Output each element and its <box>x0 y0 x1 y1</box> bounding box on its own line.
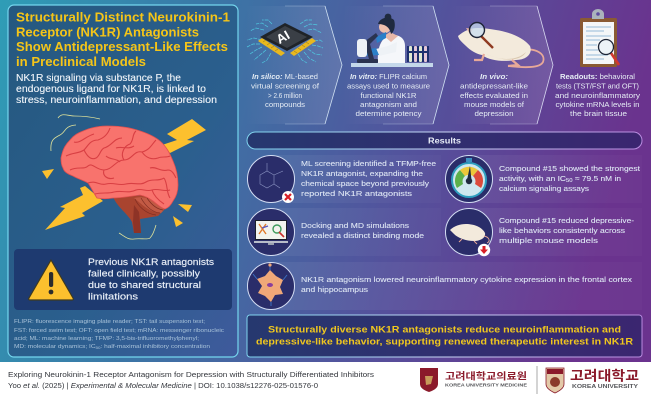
abbreviations: 50 <box>96 345 101 350</box>
title: Show Antidepressant-Like Effects <box>16 39 228 54</box>
icon: gauge <box>446 156 492 202</box>
text: readouts <box>555 72 640 118</box>
text: Compound #15 showed the strongest <box>499 164 641 173</box>
text: readouts: and neuroinflammatory <box>555 91 640 100</box>
conclusion: Structurally diverse NK1R antagonists reduce neuroinflammation and <box>268 324 621 336</box>
text: NK1R antagonism lowered neuroinflammatory cytokine expression in the frontal cortex <box>301 275 632 284</box>
abbreviations: FST: forced swim test; OFT: open field test; mRNA: messenger ribonucleic <box>14 328 224 334</box>
text: chemical space beyond previously <box>301 179 429 188</box>
conclusion: depressive-like behavior, supporting renewed therapeutic interest in NK1R <box>256 336 633 348</box>
icon: monitor <box>248 208 294 256</box>
abbreviations: MD: molecular dynamics; IC <box>14 344 86 350</box>
callout text: due to shared structural <box>88 280 201 291</box>
callout: previous failures <box>14 249 232 310</box>
callout text: limitations <box>88 292 138 302</box>
divider <box>536 366 538 394</box>
result: docking <box>248 208 441 256</box>
text: in vivo <box>460 72 528 118</box>
text: 50 <box>566 178 573 184</box>
text: in vitro: assays used to measure <box>347 82 430 90</box>
heading: results: Results <box>428 136 461 146</box>
text: calcium signaling assays <box>499 184 589 193</box>
text: in vitro: functional NK1R <box>360 91 416 100</box>
icon: AI chip: AI <box>274 27 292 47</box>
panel: in vivo step <box>449 6 553 124</box>
text: readouts: tests (TST/FST and OFT) <box>556 82 639 90</box>
text: in vivo: In vivo: <box>480 72 509 81</box>
result: cytokines <box>248 262 642 310</box>
text: Docking and MD simulations <box>301 221 409 230</box>
citation: Exploring Neurokinin-1 Receptor Antagonism for Depression with Structurally Differentiated Inhibitors <box>8 370 374 379</box>
icon: warning triangle <box>29 260 73 300</box>
callout text <box>88 257 214 302</box>
logo: Korea University Medicine: 고려대학교의료원 <box>445 370 527 382</box>
icon: microglia cell <box>248 262 294 310</box>
text: NK1R antagonist, expanding the <box>301 169 423 178</box>
icon: mouse with down arrow <box>446 208 492 256</box>
text: in vivo: antidepressant-like <box>460 82 528 90</box>
text: readouts: cytokine mRNA levels in <box>556 100 640 109</box>
text: in vitro: antagonism and <box>360 100 417 109</box>
text: readouts: the brain tissue <box>570 109 627 118</box>
text: multiple mouse models <box>499 236 598 245</box>
intro text: NK1R signaling via substance P, the <box>16 73 182 84</box>
citation: Yoo et al. (2025) | Experimental & Molecular Medicine | DOI: 10.1038/s12276-025-01576-0 <box>8 381 318 390</box>
logo: Korea University Medicine <box>420 368 527 392</box>
heading: results <box>247 132 642 149</box>
abbreviations: FLIPR: fluorescence imaging plate reader; TST: tail suspension test; <box>14 319 205 325</box>
conclusion <box>247 315 642 357</box>
text <box>301 275 632 294</box>
text: in vivo: depression <box>474 109 514 118</box>
text: in silico: virtual screening of <box>251 82 320 90</box>
title: in Preclinical Models <box>16 54 146 69</box>
abbreviations: acid; ML: machine learning; TFMP: 3,5-bis-trifluoromethylphenyl; <box>14 336 199 342</box>
text: in silico <box>251 72 320 109</box>
text <box>301 159 436 198</box>
text: in vivo: mouse models of <box>464 100 525 109</box>
text <box>499 216 634 245</box>
panel: background and hypothesis <box>8 5 238 357</box>
intro text <box>16 73 217 106</box>
callout text: failed clinically, possibly <box>88 269 200 280</box>
logo: Korea University: 고려대학교 <box>570 368 639 384</box>
result: ML screening <box>248 155 441 203</box>
title <box>16 10 230 69</box>
text: ≈ 79.5 nM in <box>573 174 621 183</box>
logo: Korea University Medicine: KOREA UNIVERSITY MEDICINE <box>445 382 527 388</box>
result: behavior <box>446 208 642 256</box>
icon: mouse with magnifier <box>458 22 544 67</box>
result: compound potency <box>446 155 642 203</box>
text <box>499 164 641 193</box>
intro text: stress, neuroinflammation, and depression <box>16 95 217 106</box>
callout text: Previous NK1R antagonists <box>88 257 214 268</box>
abbreviations: : half-maximal inhibitory concentration <box>101 344 210 350</box>
icon: clipboard with magnifier <box>580 9 619 67</box>
text: in silico: > 2.6 million <box>268 91 302 100</box>
icon: brain with lightning bolt <box>42 115 206 239</box>
text: revealed a distinct binding mode <box>301 231 424 240</box>
text: in silico: compounds <box>265 100 305 109</box>
title: Receptor (NK1R) Antagonists <box>16 24 199 39</box>
text: reported NK1R antagonists <box>301 189 412 198</box>
icon: scientist with microscope <box>351 14 433 67</box>
intro text: endogenous ligand for NK1R, is linked to <box>16 84 207 95</box>
text <box>301 221 424 240</box>
text: like behaviors consistently across <box>499 226 625 235</box>
text: and hippocampus <box>301 285 368 294</box>
panel: in silico step <box>245 6 342 124</box>
panel: readouts step <box>555 9 640 118</box>
abbreviations <box>14 319 224 350</box>
citation <box>8 370 374 390</box>
text: in vitro: determine potency <box>356 109 422 118</box>
logo: Korea University: KOREA UNIVERSITY <box>572 384 638 390</box>
text: in silico: In silico: ML-based <box>252 72 318 81</box>
text: activity, with an IC <box>499 174 560 183</box>
text: ML screening identified a TFMP-free <box>301 159 436 168</box>
text: in vitro <box>347 72 430 118</box>
text: readouts: Readouts: behavioral <box>560 72 635 81</box>
text: Compound #15 reduced depressive- <box>499 216 634 225</box>
text: in vivo: effects evaluated in <box>460 91 528 100</box>
icon: molecule with red cross <box>248 156 294 203</box>
panel: in vitro step <box>342 6 449 124</box>
logo: Korea University <box>546 368 639 393</box>
title: Structurally Distinct Neurokinin-1 <box>16 10 230 24</box>
text: in vitro: In vitro: FLIPR calcium <box>350 72 427 81</box>
